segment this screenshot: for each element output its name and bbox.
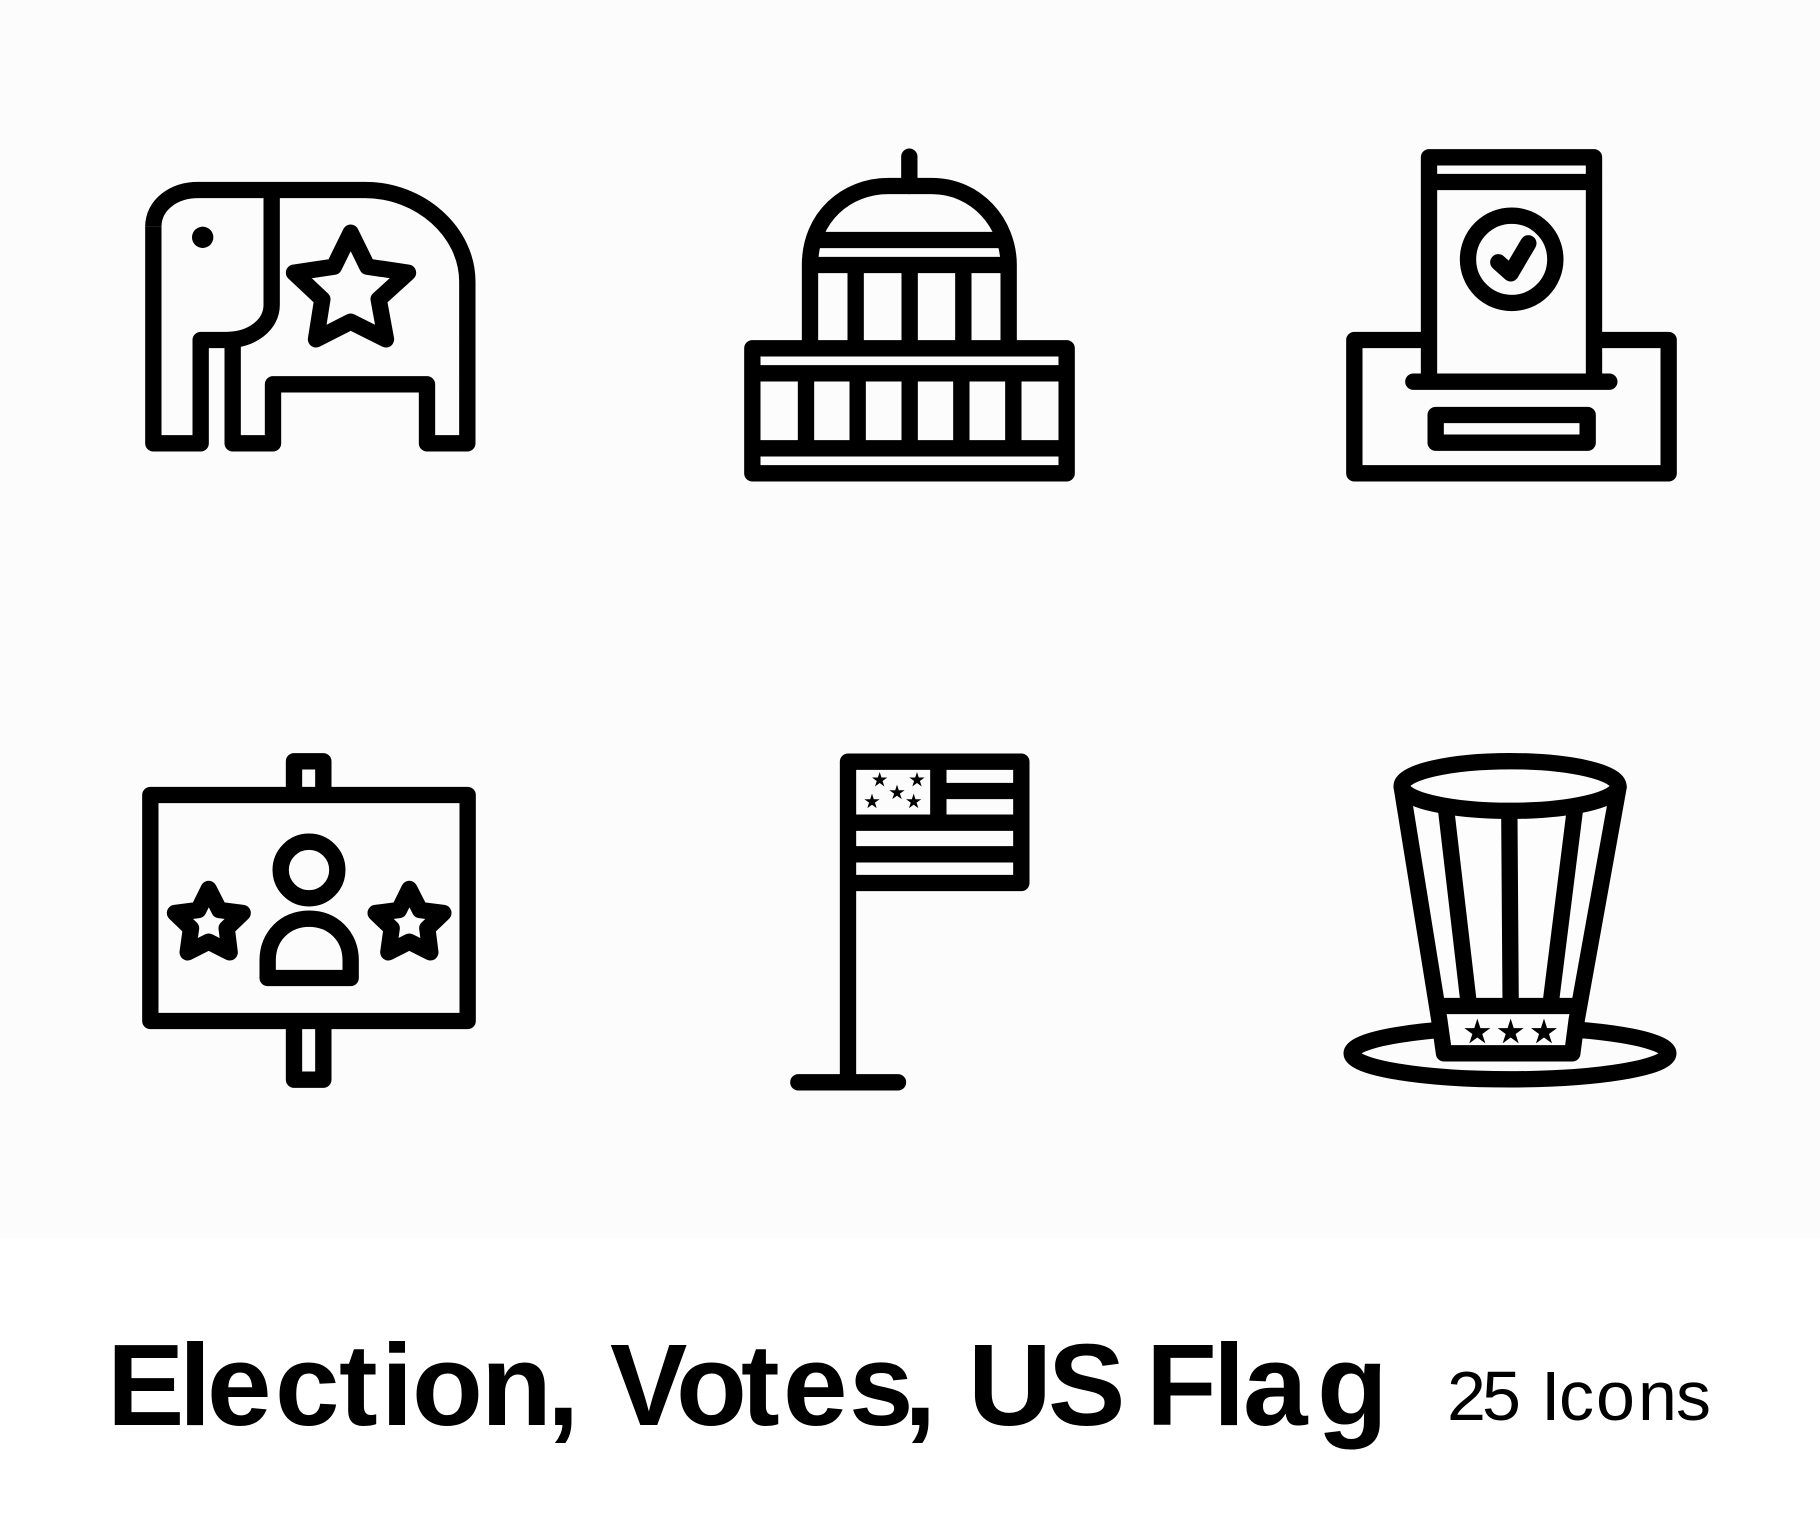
title: Election, Votes, US Flag: [107, 1320, 1388, 1450]
icon: american flag on pole: [798, 762, 1021, 1082]
icon count caption: 25 Icons: [1447, 1357, 1711, 1435]
icon: uncle sam top hat: [1352, 761, 1668, 1079]
icon: republican elephant with star: [153, 190, 467, 443]
icon: ballot box with checked vote: [1354, 157, 1669, 473]
icon: campaign sign with candidate and stars: [150, 761, 468, 1080]
icon: capitol building: [752, 157, 1067, 473]
